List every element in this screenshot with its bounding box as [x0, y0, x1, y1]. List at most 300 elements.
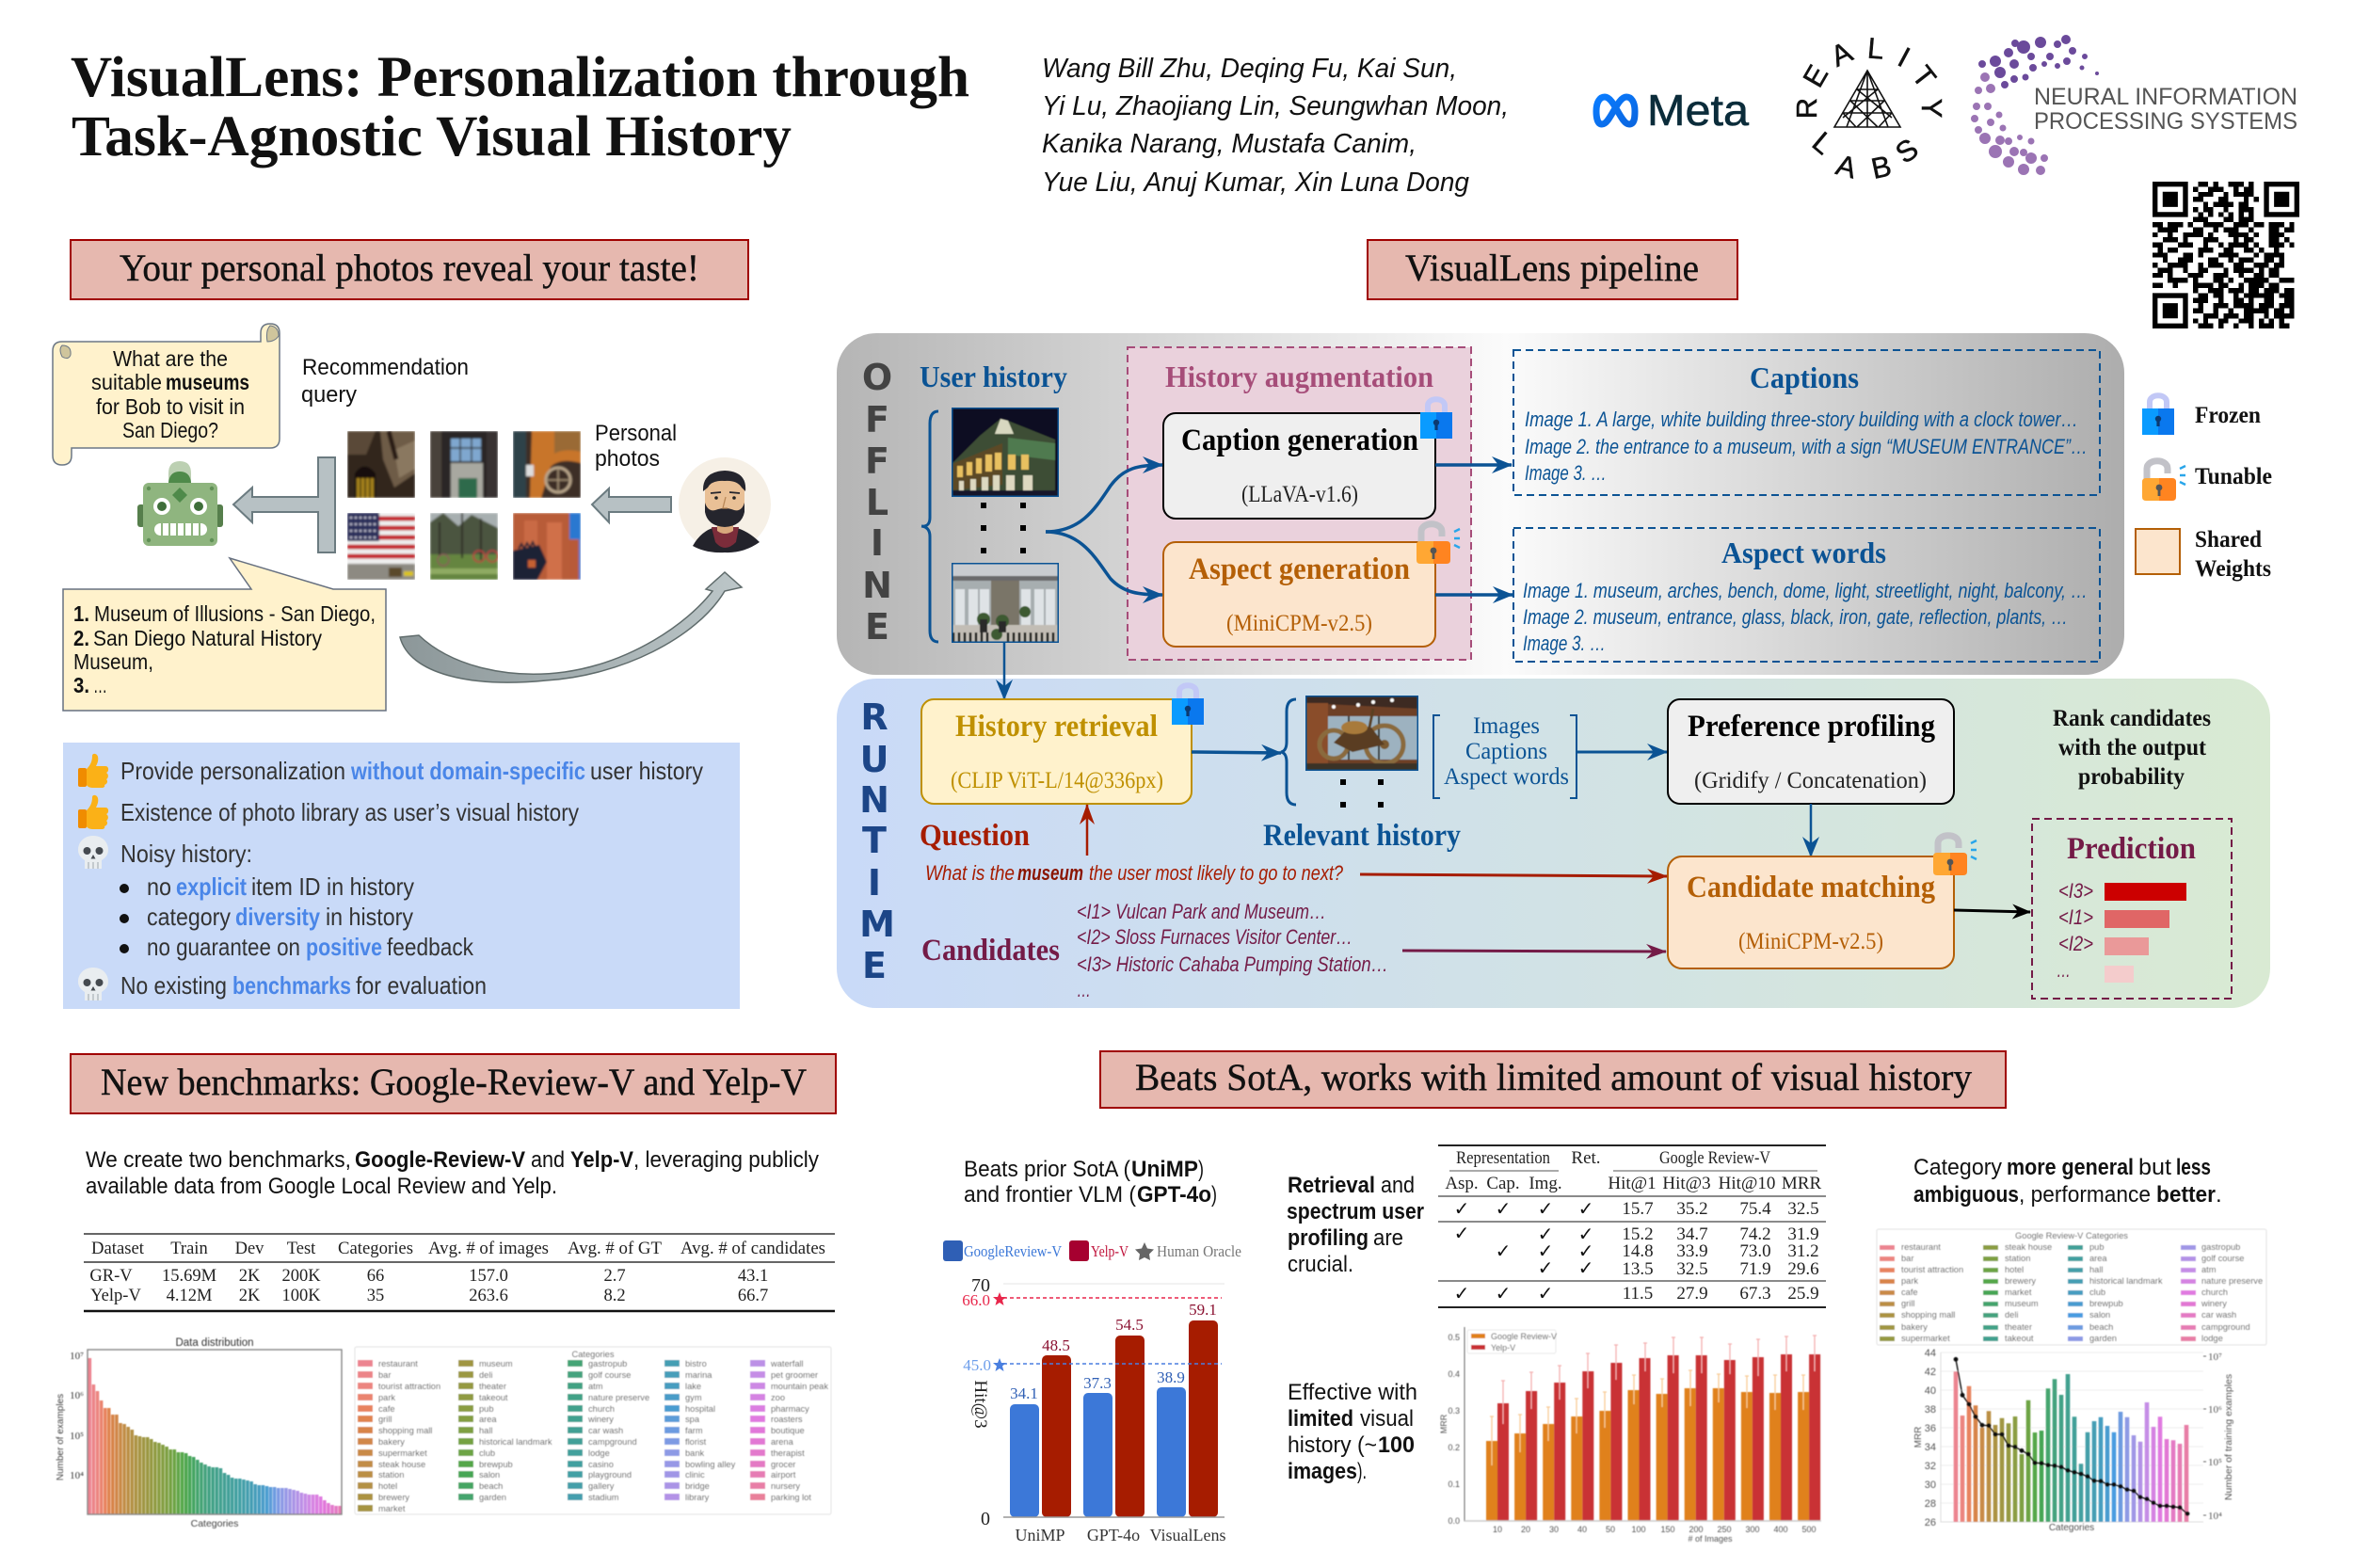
chart legend: categories: pharmacy	[771, 1404, 809, 1414]
chart legend: categories: hotel	[378, 1481, 397, 1491]
chart legend: Google Review-V categories: area	[2089, 1254, 2107, 1263]
panel: recommendation scenario	[53, 324, 771, 711]
icon: user avatar	[679, 457, 771, 552]
chart legend: categories: church	[588, 1404, 615, 1414]
chart legend: categories: mountain peak	[771, 1382, 828, 1391]
table: ablation results: 32.5	[1787, 1199, 1819, 1219]
chart legend: Google Review-V categories: gastropub	[2201, 1242, 2240, 1252]
chart legend: categories: gallery	[588, 1481, 615, 1491]
chart: Hit@3 bars: 37.3	[1083, 1374, 1112, 1392]
chart: MRR by category: 30	[1925, 1480, 1936, 1491]
table: ablation results: 73.0	[1739, 1241, 1771, 1261]
label: shared weights	[2195, 527, 2271, 582]
chart legend: categories: steak house	[378, 1460, 425, 1469]
text: bullets: explicit	[176, 872, 247, 901]
chart legend: categories: golf course	[588, 1370, 631, 1380]
chart: MRR by category: 10⁷	[2208, 1352, 2222, 1363]
box: candidate matching: Candidate matching	[1687, 871, 1935, 904]
text: beats prior SotA: and frontier VLM (	[964, 1182, 1136, 1208]
text: retrieval and profiling: and	[1381, 1173, 1415, 1198]
arrow: offline to retrieval	[1003, 643, 1005, 699]
label: shared weights: Shared	[2195, 527, 2262, 552]
box: candidate matching	[1668, 856, 1954, 968]
logo: Reality Labs: L	[1866, 31, 1885, 66]
chart: MRR by category: 10⁶	[2208, 1404, 2222, 1416]
chart legend: categories: zoo	[771, 1393, 785, 1402]
arrow: candidates to matching	[1402, 951, 1666, 952]
chart legend: categories: pet groomer	[771, 1370, 818, 1380]
text: category performance: more general	[2007, 1155, 2134, 1180]
table: ablation results: 74.2	[1739, 1224, 1771, 1244]
label: RUNTIME: U	[860, 739, 888, 780]
label: RUNTIME: N	[859, 779, 889, 821]
table: dataset statistics: 263.6	[469, 1287, 508, 1305]
chart: MRR vs number of images: 20	[1521, 1525, 1530, 1534]
table: ablation results: 27.9	[1676, 1284, 1708, 1304]
chart legend: categories: farm	[685, 1426, 703, 1435]
chart legend: Yelp-V	[1091, 1242, 1129, 1260]
chart: MRR by category: Categories	[2049, 1523, 2094, 1533]
table: ablation results: ✓	[1496, 1240, 1511, 1262]
chart: MRR vs number of images	[1439, 1327, 1821, 1544]
chart legend: Google Review-V categories: deli	[2005, 1310, 2018, 1320]
table: ablation results: Ret.	[1571, 1148, 1601, 1168]
table: ablation results: Hit@10	[1719, 1174, 1775, 1193]
box: captions	[1513, 350, 2100, 495]
table: ablation results: ✓	[1578, 1223, 1593, 1245]
chart legend: categories: stadium	[588, 1493, 619, 1502]
chart legend: Google Review-V categories: pub	[2089, 1242, 2105, 1252]
table: ablation results: ✓	[1578, 1197, 1593, 1220]
chart: Hit@3 bars: Hit@3	[970, 1380, 990, 1429]
chart: MRR vs number of images: 50	[1606, 1525, 1615, 1534]
scroll: user query: for Bob to visit in	[96, 394, 245, 419]
box: history retrieval: History retrieval	[955, 710, 1158, 744]
table: ablation results: ✓	[1538, 1223, 1553, 1245]
box: caption generation: Caption generation	[1181, 424, 1418, 457]
chart: Hit@3 bars: 48.5	[1042, 1336, 1070, 1354]
heading: new benchmarks	[71, 1054, 836, 1113]
table: ablation results: 32.5	[1676, 1259, 1708, 1279]
panel: runtime pipeline	[837, 643, 2270, 1008]
label: OFFLINE: E	[865, 606, 889, 648]
chart: MRR vs number of images: 250	[1717, 1525, 1732, 1534]
chart: MRR vs number of images: 500	[1801, 1525, 1817, 1534]
table: ablation results: 31.2	[1787, 1241, 1819, 1261]
text: retrieval and profiling: are	[1373, 1225, 1403, 1251]
chart legend: categories: area	[479, 1415, 497, 1424]
table: ablation results: ✓	[1538, 1240, 1553, 1262]
table: ablation results: MRR	[1782, 1174, 1821, 1193]
icon: thumbs up	[78, 754, 108, 788]
chart legend: categories	[355, 1347, 831, 1514]
chart legend: categories: theater	[479, 1382, 506, 1391]
table: ablation results: 14.8	[1622, 1241, 1654, 1261]
text: retrieval and profiling	[1287, 1173, 1424, 1277]
box: prediction: <I2>	[2058, 932, 2093, 955]
label: OFFLINE: N	[862, 565, 892, 606]
chart legend: categories: boutique	[771, 1426, 805, 1435]
authors: Yi Lu, Zhaojiang Lin, Seungwhan Moon,	[1042, 91, 1509, 121]
question block	[920, 819, 1344, 885]
text: bullets: user history	[590, 757, 703, 785]
chart legend: categories: car wash	[588, 1426, 623, 1435]
chart legend: categories: salon	[479, 1470, 500, 1480]
label: OFFLINE: L	[866, 482, 888, 523]
label: personal photos: photos	[595, 446, 660, 472]
chart: MRR vs number of images: 100	[1631, 1525, 1646, 1534]
chart legend: Google Review-V categories: golf course	[2201, 1254, 2244, 1263]
chart legend: categories: gastropub	[588, 1359, 627, 1368]
candidates block: Candidates	[921, 934, 1060, 968]
chart legend: categories: beach	[479, 1481, 503, 1491]
heading: relevant history: Relevant history	[1263, 819, 1461, 853]
table: ablation results: ✓	[1538, 1256, 1553, 1279]
chart legend: Google Review-V categories: nature preserve	[2201, 1276, 2263, 1286]
photo: motorcycle	[1305, 696, 1418, 771]
chart: MRR by category: 34	[1925, 1442, 1936, 1453]
title: VisualLens: Personalization through	[71, 46, 969, 109]
icon: tunable lock	[1417, 524, 1460, 564]
chart legend: categories: takeout	[479, 1393, 508, 1402]
chart legend: categories: tourist attraction	[378, 1382, 440, 1391]
chart legend: Google Review-V categories: shopping mall	[1901, 1310, 1955, 1320]
heading: pipeline	[1368, 240, 1737, 299]
text: bullets: for evaluation	[356, 971, 487, 1000]
chart: Hit@3 bars: 70	[971, 1275, 990, 1296]
text: category performance	[1913, 1155, 2222, 1208]
brace	[1281, 699, 1296, 805]
text: limited visual history: visual	[1360, 1406, 1414, 1432]
chart legend: categories: playground	[588, 1470, 632, 1480]
text: bullets: positive	[306, 933, 382, 961]
text: benchmark description	[86, 1147, 819, 1199]
chart: MRR by category: 36	[1925, 1423, 1936, 1434]
chart legend: categories: florist	[685, 1437, 707, 1447]
table: ablation results: 71.9	[1739, 1259, 1771, 1279]
icon: skull	[78, 836, 108, 869]
arrow: question to matching	[1360, 874, 1667, 876]
table: ablation results: Img.	[1529, 1174, 1562, 1193]
chart legend: Google Review-V categories: garden	[2089, 1334, 2117, 1343]
logo: NeurIPS: NEURAL INFORMATION	[2034, 84, 2297, 110]
label: RUNTIME: R	[860, 696, 888, 738]
authors: Yue Liu, Anuj Kumar, Xin Luna Dong	[1042, 168, 1469, 198]
chart legend: Google Review-V categories: steak house	[2005, 1242, 2052, 1252]
text: bullets: no guarantee on	[147, 933, 300, 961]
box: captions: Image 3. …	[1525, 461, 1607, 485]
brackets: images captions aspect words: Aspect words	[1444, 764, 1569, 790]
logo: Reality Labs	[1790, 31, 1948, 185]
chart: MRR by category: 40	[1925, 1385, 1936, 1397]
chart legend: categories: casino	[588, 1460, 614, 1469]
table: ablation results: ✓	[1578, 1240, 1593, 1262]
chart legend: Google Review-V categories: supermarket	[1901, 1334, 1950, 1343]
chart legend: categories: spa	[685, 1415, 700, 1424]
chart legend: Google Review-V categories: campground	[2201, 1322, 2250, 1332]
candidates block: <I1> Vulcan Park and Museum…	[1077, 900, 1326, 923]
text: retrieval and profiling: profiling	[1288, 1225, 1369, 1251]
chart legend: Google Review-V categories: club	[2089, 1288, 2105, 1297]
chart: MRR vs number of images: 10	[1493, 1525, 1502, 1534]
text: benchmark description: and	[531, 1147, 565, 1173]
question block: museum	[1017, 861, 1083, 885]
text: limited visual history: images	[1288, 1459, 1357, 1484]
icon: frozen lock	[1172, 685, 1204, 725]
label: recommendation query	[301, 355, 469, 408]
scroll: user query: San Diego?	[122, 418, 218, 442]
chart legend: categories: lake	[685, 1382, 701, 1391]
chart legend: categories: bakery	[378, 1437, 405, 1447]
text: benchmark description: , leveraging publicly	[633, 1147, 819, 1173]
box: captions: Image 1. A large, white building three-story building with a clock tower…	[1525, 408, 2078, 431]
chart: MRR by category: 44	[1925, 1348, 1936, 1359]
table: ablation results: Hit@3	[1662, 1174, 1711, 1193]
table: dataset statistics: GR-V	[89, 1267, 133, 1286]
table: dataset statistics: Categories	[338, 1240, 413, 1258]
logo: Reality Labs: Y	[1915, 99, 1948, 118]
text: bullets: Provide personalization	[120, 757, 345, 785]
chart legend: Google Review-V categories: brewery	[2005, 1276, 2036, 1286]
chart legend: Google Review-V categories: cafe	[1901, 1288, 1918, 1297]
chart legend: Google Review-V categories: park	[1901, 1276, 1918, 1286]
label: OFFLINE: F	[865, 440, 889, 482]
text: benchmark description: We create two benchmarks,	[86, 1147, 351, 1173]
text: benchmark description: Yelp-V	[570, 1147, 633, 1173]
swatch: shared weights	[2136, 529, 2180, 574]
chart legend: categories: pub	[479, 1404, 494, 1414]
photo: museum entrance	[952, 563, 1059, 643]
chart: data distribution: 10⁶	[70, 1390, 84, 1401]
text: bullets: no	[147, 872, 171, 901]
chart legend: categories: Categories	[572, 1350, 615, 1359]
chart: Hit@3 bars: 59.1	[1189, 1301, 1217, 1319]
chart: MRR by category: 10⁵	[2208, 1457, 2222, 1468]
heading: new benchmarks: New benchmarks: Google-Review-V and Yelp-V	[101, 1061, 807, 1103]
text: limited visual history: 100	[1378, 1432, 1415, 1458]
candidates block: …	[1077, 978, 1091, 1001]
box: preference profiling	[1668, 699, 1954, 804]
brackets: images captions aspect words: Captions	[1465, 739, 1547, 764]
table: dataset statistics: Avg. # of images	[428, 1240, 549, 1258]
logo: Reality Labs: E	[1797, 59, 1834, 92]
chart legend: categories: therapist	[771, 1448, 805, 1458]
chart legend: categories: clinic	[685, 1470, 705, 1480]
chart legend: Google Review-V categories	[1877, 1229, 2266, 1345]
chart: MRR vs number of images: 0.1	[1448, 1480, 1460, 1489]
chart legend: Google Review-V categories: lodge	[2201, 1334, 2223, 1343]
chart: MRR vs number of images: 0.3	[1448, 1406, 1460, 1416]
table: dataset statistics: 200K	[281, 1267, 321, 1286]
logo: Reality Labs: S	[1889, 132, 1924, 170]
logo: Reality Labs: T	[1906, 59, 1943, 94]
label: RUNTIME	[859, 696, 895, 986]
text: limited visual history: ).	[1357, 1459, 1367, 1484]
text: benchmark description: available data from Google Local Review and Yelp.	[86, 1174, 557, 1199]
speech bubble: recommendations: 1.	[73, 601, 89, 626]
chart: MRR by category: 26	[1925, 1517, 1936, 1528]
table: ablation results: Cap.	[1486, 1174, 1520, 1193]
label: RUNTIME: E	[862, 945, 887, 986]
table: dataset statistics: 2K	[239, 1267, 261, 1286]
text: beats prior SotA: UniMP	[1131, 1157, 1198, 1182]
table: dataset statistics: 43.1	[738, 1267, 768, 1286]
speech bubble: recommendations: Museum,	[73, 649, 153, 674]
legend: locks	[2136, 395, 2272, 582]
table: dataset statistics: Dev	[235, 1240, 264, 1258]
chart legend: categories: waterfall	[770, 1359, 804, 1368]
chart legend: Google Review-V categories: brewpub	[2089, 1299, 2123, 1308]
chart: data distribution: Number of examples	[56, 1394, 66, 1480]
chart: MRR vs number of images: 40	[1577, 1525, 1587, 1534]
chart legend: categories: museum	[479, 1359, 513, 1368]
chart: MRR vs number of images: 30	[1549, 1525, 1559, 1534]
text: retrieval and profiling: Retrieval	[1288, 1173, 1375, 1198]
table: ablation results: ✓	[1496, 1197, 1511, 1220]
label: recommendation query: query	[301, 382, 357, 408]
chart: data distribution: 10⁷	[70, 1351, 84, 1362]
chart: data distribution: Categories	[191, 1518, 238, 1529]
question block: What is the	[925, 861, 1015, 885]
label: RUNTIME: M	[859, 904, 895, 945]
arrow: photos and query to robot	[233, 457, 335, 552]
chart: Hit@3 bars: 54.5	[1115, 1316, 1144, 1334]
chart legend	[943, 1240, 1241, 1261]
icon: frozen lock	[2142, 395, 2174, 435]
brackets: images captions aspect words: Images	[1473, 713, 1540, 739]
chart legend: categories: historical landmark	[479, 1437, 552, 1447]
table: ablation results: 15.2	[1622, 1224, 1654, 1244]
text: bullets: Noisy history:	[120, 840, 252, 868]
question block: Question	[920, 819, 1030, 853]
arrow: photos to caption generation	[1046, 465, 1162, 532]
box: history retrieval	[921, 699, 1192, 804]
table: ablation results: 75.4	[1739, 1199, 1771, 1219]
chart legend: categories: bar	[378, 1370, 391, 1380]
chart: data distribution	[56, 1337, 342, 1529]
chart legend: Human Oracle	[1157, 1242, 1241, 1260]
logo: Reality Labs: I	[1893, 40, 1915, 73]
box: prediction: <I3>	[2058, 879, 2093, 903]
chart legend: categories: club	[479, 1448, 495, 1458]
chart legend: categories: supermarket	[378, 1448, 427, 1458]
arrow: relevant history to preference	[1577, 751, 1667, 753]
text: retrieval and profiling: spectrum user	[1287, 1199, 1424, 1224]
text: category performance: less	[2176, 1155, 2211, 1180]
speech bubble: recommendations	[63, 558, 386, 711]
chart: Hit@3 bars: 45.0	[963, 1356, 991, 1374]
text: rank candidates: Rank candidates	[2053, 706, 2211, 731]
box: caption generation	[1163, 413, 1435, 519]
box: candidate matching: (MiniCPM-v2.5)	[1738, 929, 1883, 954]
photo grid	[347, 431, 581, 580]
text: bullets: Existence of photo library as user’s visual history	[120, 798, 579, 826]
chart legend: categories: hospital	[685, 1404, 715, 1414]
panel: offline pipeline	[837, 333, 2124, 675]
label: recommendation query: Recommendation	[302, 355, 469, 380]
heading: personal photos: Your personal photos reveal your taste!	[120, 247, 699, 289]
brackets: images captions aspect words	[1433, 713, 1577, 798]
table: ablation results: 31.9	[1787, 1224, 1819, 1244]
box: aspect words	[1513, 528, 2100, 662]
chart legend: categories: airport	[771, 1470, 796, 1480]
photo: museum at night	[952, 408, 1059, 497]
chart legend: categories: arena	[771, 1437, 794, 1447]
table: ablation results: ✓	[1578, 1256, 1593, 1279]
table: dataset statistics: Train	[170, 1240, 208, 1258]
chart: Hit@3 bars: 0	[981, 1509, 990, 1529]
box: prediction: Prediction	[2067, 832, 2196, 866]
chart legend: categories: grill	[378, 1415, 392, 1424]
candidates block: <I2> Sloss Furnaces Visitor Center…	[1077, 925, 1353, 949]
chart: MRR by category: MRR	[1913, 1427, 1924, 1448]
table: ablation results: 35.2	[1676, 1199, 1708, 1219]
text: bullets: without domain-specific	[350, 757, 585, 785]
chart: Hit@3 bars	[943, 1240, 1241, 1544]
table: dataset statistics: 157.0	[469, 1267, 508, 1286]
text: beats prior SotA: )	[1198, 1157, 1204, 1182]
chart legend: categories: bridge	[685, 1481, 710, 1491]
table: ablation results: 11.5	[1623, 1284, 1653, 1304]
chart legend: Google Review-V categories: market	[2005, 1288, 2032, 1297]
arrow: aspect output	[1435, 593, 1513, 597]
box: aspect words: Image 3. …	[1523, 632, 1606, 655]
heading: personal photos	[71, 240, 748, 299]
icon: thumbs up	[78, 795, 108, 829]
chart legend: categories: park	[378, 1393, 395, 1402]
box: history augmentation	[1128, 347, 1471, 660]
chart: MRR by category: 28	[1925, 1498, 1936, 1510]
table: ablation results: 67.3	[1739, 1284, 1771, 1304]
chart legend: categories: marina	[685, 1370, 712, 1380]
candidates block	[921, 900, 1388, 1001]
heading: pipeline: VisualLens pipeline	[1405, 247, 1699, 289]
chart legend: Google Review-V categories: bar	[1901, 1254, 1913, 1263]
scroll: user query: museums	[166, 370, 249, 394]
text: limited visual history: Effective with	[1288, 1380, 1417, 1405]
chart legend: categories: hall	[479, 1426, 492, 1435]
chart legend: categories: cafe	[378, 1404, 395, 1414]
text: bullets: diversity	[235, 903, 320, 931]
arrow: user to photos	[592, 488, 671, 522]
text: category performance: ambiguous	[1913, 1182, 2019, 1208]
box: captions: Captions	[1750, 360, 1859, 394]
speech bubble: recommendations: San Diego Natural History	[93, 626, 322, 650]
box: prediction: …	[2057, 958, 2071, 982]
chart legend: categories: shopping mall	[378, 1426, 432, 1435]
table: dataset statistics: 35	[367, 1287, 384, 1305]
dots	[981, 503, 1026, 553]
box: history retrieval: (CLIP ViT-L/14@336px)	[951, 768, 1163, 793]
table: ablation results: ✓	[1538, 1282, 1553, 1304]
table: dataset statistics: 100K	[281, 1287, 321, 1305]
table: ablation results: ✓	[1538, 1197, 1553, 1220]
arrow: photos to aspect generation	[1046, 532, 1162, 595]
label: frozen: Frozen	[2195, 403, 2261, 428]
chart legend: categories: nursery	[771, 1481, 800, 1491]
text: category performance: .	[2216, 1182, 2222, 1208]
chart legend: categories: nature preserve	[588, 1393, 649, 1402]
chart legend: categories: roasters	[771, 1415, 803, 1424]
label: personal photos	[595, 421, 677, 472]
chart: MRR by category: 32	[1925, 1461, 1936, 1472]
chart legend: categories: brewery	[378, 1493, 409, 1502]
box: aspect generation: (MiniCPM-v2.5)	[1226, 611, 1372, 636]
chart legend: Google Review-V categories: beach	[2089, 1322, 2113, 1332]
logo: NeurIPS	[1972, 36, 2297, 174]
text: beats prior SotA: GPT-4o	[1137, 1182, 1211, 1208]
label: OFFLINE: I	[871, 522, 884, 564]
